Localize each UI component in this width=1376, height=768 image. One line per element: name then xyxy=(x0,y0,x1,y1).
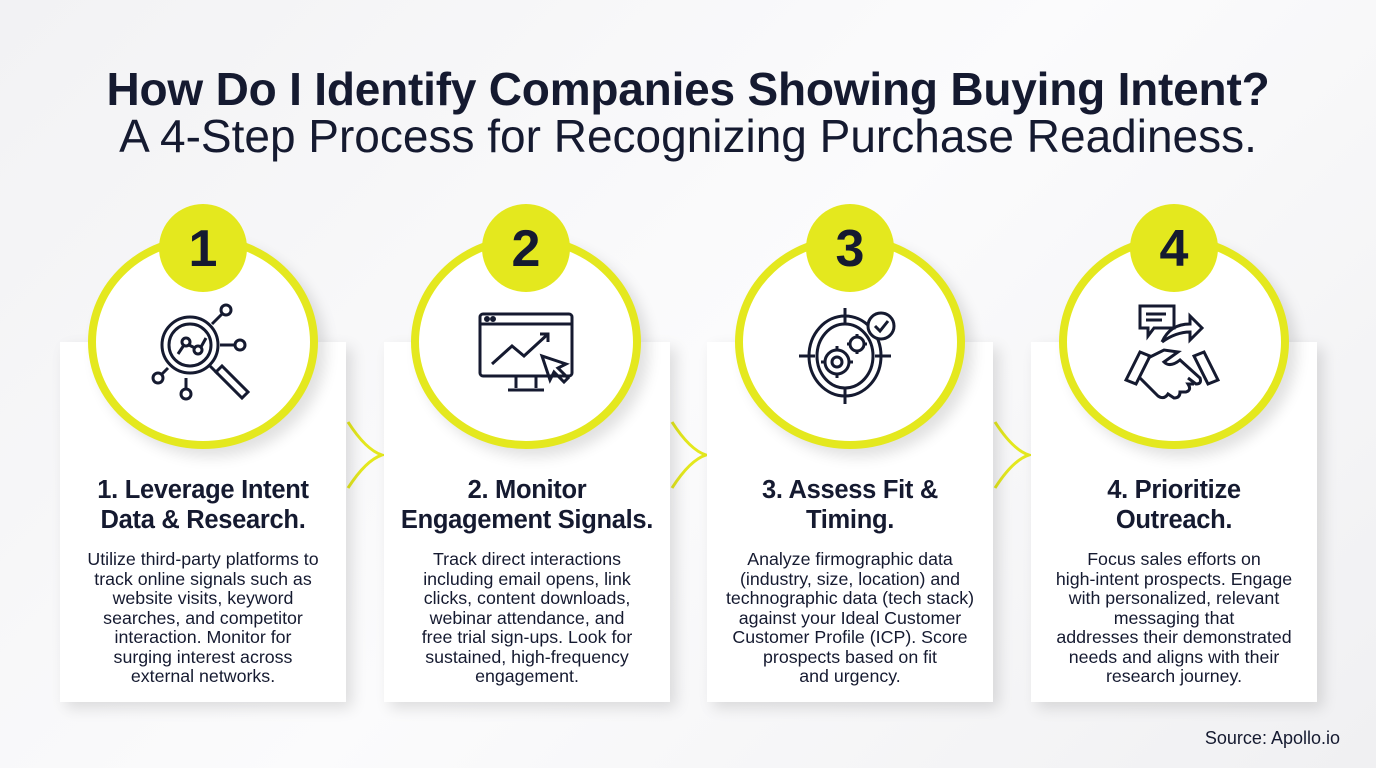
heading 1: 1. Leverage Intent xyxy=(97,476,309,504)
text 3: technographic data (tech stack) xyxy=(726,588,974,608)
icon: magnifier network xyxy=(152,304,250,400)
circle 3 xyxy=(735,235,965,449)
text 1: searches, and competitor xyxy=(103,608,303,628)
heading 4: Outreach. xyxy=(1116,506,1232,534)
title: How Do I Identify Companies Showing Buying Intent? xyxy=(106,63,1269,115)
icon: target gears xyxy=(799,308,896,404)
icon: handshake chat xyxy=(1124,304,1220,400)
heading 3: Timing. xyxy=(806,506,894,534)
circle 4 xyxy=(1059,235,1289,449)
text 4: Focus sales efforts on xyxy=(1087,549,1261,569)
circle 1 xyxy=(88,235,318,449)
arrow: 1 to 2 xyxy=(346,421,384,489)
text 2: sustained, high-frequency xyxy=(425,646,629,666)
arrow: 2 to 3 xyxy=(670,421,707,489)
text 4: addresses their demonstrated xyxy=(1056,627,1292,647)
icon: monitor chart xyxy=(478,312,574,392)
heading 4 xyxy=(1107,476,1241,534)
badge 1 xyxy=(159,204,247,292)
arrow: 3 to 4 xyxy=(994,421,1031,489)
badge 4 xyxy=(1130,204,1218,292)
text 3: Customer Profile (ICP). Score xyxy=(732,627,968,647)
text 3 xyxy=(726,549,974,686)
text 1: website visits, keyword xyxy=(113,588,293,608)
text 3: against your Ideal Customer xyxy=(739,608,961,628)
circle 2 xyxy=(411,235,641,449)
text 4: with personalized, relevant xyxy=(1069,588,1279,608)
text 2 xyxy=(422,549,632,686)
text 1: surging interest across xyxy=(114,646,292,666)
text 3: (industry, size, location) and xyxy=(740,568,960,588)
badge 2 xyxy=(482,204,570,292)
text 2: free trial sign-ups. Look for xyxy=(422,627,632,647)
text 1: track online signals such as xyxy=(94,568,312,588)
text 1: external networks. xyxy=(131,666,275,686)
text 1: Utilize third-party platforms to xyxy=(87,549,319,569)
panel: step 1 xyxy=(60,342,346,702)
badge 4: 4 xyxy=(1160,220,1188,278)
text 4: messaging that xyxy=(1114,608,1234,628)
text 4: research journey. xyxy=(1106,666,1242,686)
text 4 xyxy=(1056,549,1292,686)
badge 3: 3 xyxy=(836,220,864,278)
text 2: webinar attendance, and xyxy=(430,608,624,628)
text 3: and urgency. xyxy=(799,666,901,686)
heading 1 xyxy=(97,476,309,534)
heading 2: 2. Monitor xyxy=(468,476,586,504)
badge 2: 2 xyxy=(512,220,540,278)
heading 2 xyxy=(401,476,653,534)
text 3: Analyze firmographic data xyxy=(747,549,953,569)
subtitle: A 4-Step Process for Recognizing Purchase Readiness. xyxy=(119,110,1257,162)
heading 1: Data & Research. xyxy=(101,506,305,534)
panel: step 3 xyxy=(707,342,993,702)
badge 3 xyxy=(806,204,894,292)
text 2: engagement. xyxy=(475,666,579,686)
text 1 xyxy=(87,549,319,686)
heading 3 xyxy=(762,476,938,534)
text 4: high-intent prospects. Engage xyxy=(1056,568,1292,588)
text 2: including email opens, link xyxy=(423,568,631,588)
heading 2: Engagement Signals. xyxy=(401,506,653,534)
badge 1: 1 xyxy=(189,220,217,278)
text 4: needs and aligns with their xyxy=(1069,646,1279,666)
heading 3: 3. Assess Fit & xyxy=(762,476,938,504)
text 1: interaction. Monitor for xyxy=(115,627,291,647)
source: Source: Apollo.io xyxy=(1205,728,1340,748)
text 3: prospects based on fit xyxy=(763,646,937,666)
text 2: Track direct interactions xyxy=(433,549,621,569)
heading 4: 4. Prioritize xyxy=(1107,476,1241,504)
panel: step 2 xyxy=(384,342,670,702)
panel: step 4 xyxy=(1031,342,1317,702)
text 2: clicks, content downloads, xyxy=(424,588,630,608)
